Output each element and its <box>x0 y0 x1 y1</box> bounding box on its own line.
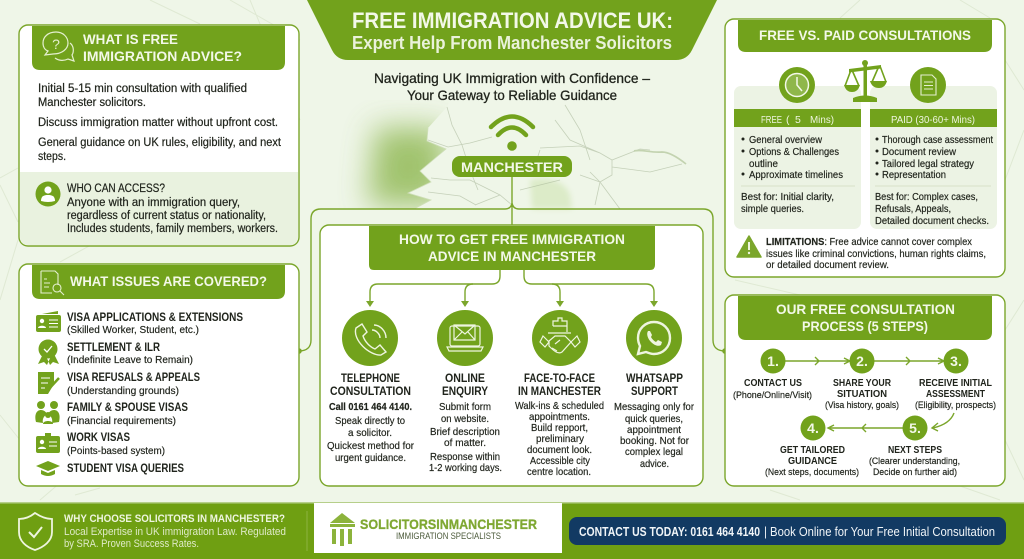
limitations note: issues like criminal convictions, human rights claims, <box>766 248 986 260</box>
method: face-to-face: appointments. <box>529 411 590 423</box>
step 1 <box>733 348 812 401</box>
icon: document search <box>41 271 64 295</box>
step 5: 5. <box>909 420 921 436</box>
icon: warning triangle <box>737 236 761 257</box>
who can access: Anyone with an immigration query, <box>67 197 240 209</box>
heading <box>738 20 992 52</box>
item: work visas: WORK VISAS <box>67 432 130 444</box>
free column: Mins) <box>810 114 834 126</box>
step 4: GUIDANCE <box>788 455 837 467</box>
icon: work badge <box>36 433 60 453</box>
why choose text: Local Expertise in UK immigration Law. Regulated <box>64 526 286 538</box>
method: telephone consultation: Call 0161 464 4140. <box>329 401 412 413</box>
footer bar <box>0 502 1024 559</box>
method: face-to-face: centre location. <box>527 466 591 478</box>
method: online enquiry: 1-2 working days. <box>429 462 502 474</box>
step 1: (Phone/Online/Visit) <box>733 390 812 401</box>
icon: clock <box>779 67 815 103</box>
heading <box>369 226 655 270</box>
step 3 <box>915 348 996 411</box>
item: family visas <box>67 402 188 427</box>
step 1: 1. <box>767 353 779 369</box>
panel: consultation process <box>725 295 1005 486</box>
method: face-to-face: preliminary <box>536 433 585 445</box>
heading: FREE VS. PAID CONSULTATIONS <box>759 27 971 43</box>
who can access: regardless of current status or nationality, <box>67 210 266 222</box>
item: visa applications <box>67 312 243 336</box>
method: telephone consultation: Speak directly to <box>335 415 405 427</box>
map of Manchester region <box>368 105 686 209</box>
step 5 <box>869 416 960 478</box>
heading: ADVICE IN MANCHESTER <box>428 248 596 264</box>
description text: Initial 5-15 min consultation with qualified <box>38 83 247 95</box>
icon: laptop envelope <box>437 310 493 366</box>
Manchester label: MANCHESTER <box>461 159 563 175</box>
item: refusals: (Understanding grounds) <box>67 385 179 397</box>
step 4 <box>765 416 859 478</box>
method: whatsapp support: WHATSAPP <box>626 373 683 385</box>
step 4: 4. <box>807 420 819 436</box>
method: whatsapp support: advice. <box>640 458 669 470</box>
connector frame <box>296 177 728 354</box>
limitations note: or detailed document review. <box>766 259 889 271</box>
Manchester label <box>452 156 572 177</box>
description text <box>38 83 282 163</box>
paid column: Tailored legal strategy <box>882 158 975 170</box>
method: face-to-face: Walk-ins & scheduled <box>515 400 604 412</box>
free column: simple queries. <box>741 203 804 215</box>
free column: Options & Challenges <box>749 146 839 158</box>
method: whatsapp support: complex legal <box>625 446 683 458</box>
method: online enquiry <box>429 373 502 474</box>
method: telephone consultation <box>327 373 414 464</box>
who can access <box>67 183 278 235</box>
item: refusals <box>67 372 200 397</box>
paid column: Detailed document checks. <box>875 215 989 227</box>
item: settlement: (Indefinite Leave to Remain) <box>67 354 193 366</box>
step 1: CONTACT US <box>744 377 802 389</box>
method: telephone consultation: CONSULTATION <box>330 386 411 398</box>
icon: pillars <box>330 513 355 546</box>
logo <box>314 503 562 553</box>
step 3: RECEIVE INITIAL <box>919 377 992 389</box>
item: family visas: FAMILY & SPOUSE VISAS <box>67 402 188 414</box>
description text: General guidance on UK rules, eligibility, and next <box>38 137 282 149</box>
step 2: SHARE YOUR <box>833 377 891 389</box>
panel: what issues are covered <box>19 264 299 486</box>
why choose text: WHY CHOOSE SOLICITORS IN MANCHESTER? <box>64 513 285 525</box>
icon: scales of justice <box>844 60 887 102</box>
method: face-to-face: Build repport, <box>531 422 588 434</box>
method: whatsapp support: SUPPORT <box>631 386 678 398</box>
icon: family <box>35 401 60 424</box>
free column: General overview <box>749 134 822 146</box>
heading: IMMIGRATION ADVICE? <box>83 49 242 64</box>
panel: free vs paid consultations <box>725 19 1005 277</box>
contact pill <box>569 517 1006 545</box>
icon: appeal document <box>38 372 59 394</box>
paid column: Thorough case assessment <box>882 134 993 146</box>
step 2 <box>825 348 899 411</box>
icon: whatsapp <box>626 310 682 366</box>
item: family visas: (Financial requirements) <box>67 415 176 427</box>
who can access: WHO CAN ACCESS? <box>67 183 165 195</box>
logo: SOLICITORSINMANCHESTER <box>360 516 537 532</box>
title: FREE IMMIGRATION ADVICE UK: <box>352 8 673 33</box>
free column: outline <box>749 158 778 170</box>
method: online enquiry: on website. <box>441 413 489 425</box>
panel: what is free immigration advice <box>19 25 299 246</box>
icon: handshake <box>532 310 588 366</box>
method: online enquiry: Brief description <box>430 426 500 438</box>
icon: question bubbles: ? <box>52 36 60 52</box>
step 3: ASSESSMENT <box>926 388 985 400</box>
connector arrows <box>366 270 658 307</box>
method: telephone consultation: a solicitor. <box>348 427 392 439</box>
tagline <box>374 70 650 103</box>
icon: telephone <box>342 310 398 366</box>
method: online enquiry: ENQUIRY <box>442 386 488 398</box>
heading: PROCESS (5 STEPS) <box>802 318 928 334</box>
method: face-to-face <box>515 373 604 478</box>
free column: 5 <box>795 114 801 126</box>
method: face-to-face: Accessible city <box>530 455 591 467</box>
method: telephone consultation: urgent guidance. <box>335 452 406 464</box>
icon: shield <box>19 513 52 550</box>
method: telephone consultation: Quickest method for <box>327 440 414 452</box>
paid column: PAID (30-60+ Mins) <box>891 114 975 126</box>
step 3: 3. <box>950 353 962 369</box>
step 2: 2. <box>856 353 868 369</box>
icon: document <box>910 67 946 103</box>
step 4: GET TAILORED <box>780 444 845 456</box>
title banner <box>307 0 717 60</box>
heading: OUR FREE CONSULTATION <box>776 301 955 317</box>
why choose text <box>64 513 286 550</box>
icon: visa card <box>36 311 61 332</box>
free column: Approximate timelines <box>749 169 843 181</box>
method: online enquiry: ONLINE <box>445 373 485 385</box>
item: visa applications: (Skilled Worker, Student, etc.) <box>67 324 199 336</box>
who can access: Includes students, family members, workers. <box>67 223 278 235</box>
step 5: Decide on further aid) <box>873 467 957 478</box>
step 5: (Clearer understanding, <box>869 456 960 467</box>
method: whatsapp support: quick queries, <box>625 413 683 425</box>
heading <box>738 296 992 340</box>
icon: question bubbles <box>43 32 74 61</box>
description text: Discuss immigration matter without upfront cost. <box>38 117 278 129</box>
heading: WHAT ISSUES ARE COVERED? <box>70 273 267 289</box>
free column: ( <box>786 114 790 126</box>
heading <box>32 265 285 299</box>
paid column: Best for: Complex cases, <box>875 191 978 203</box>
step 4: (Next steps, documents) <box>765 467 859 478</box>
item: visa applications: VISA APPLICATIONS & EXTENSIONS <box>67 312 243 324</box>
free column <box>734 86 861 229</box>
method: telephone consultation: TELEPHONE <box>341 373 400 385</box>
method: online enquiry: Response within <box>430 451 500 463</box>
method: whatsapp support: appointment <box>627 424 681 436</box>
free column: FREE <box>761 114 782 126</box>
free column: Best for: Initial clarity, <box>741 191 834 203</box>
process arrows <box>785 357 954 432</box>
method: face-to-face: document look. <box>527 444 592 456</box>
heading <box>32 26 285 70</box>
tagline: Navigating UK Immigration with Confidence – <box>374 70 650 86</box>
item: settlement: SETTLEMENT & ILR <box>67 342 161 354</box>
limitations note <box>766 236 986 271</box>
step 2: (Visa history, goals) <box>825 400 899 411</box>
paid column: Representation <box>882 169 946 181</box>
description text: Manchester solicitors. <box>38 97 146 109</box>
why choose text: by SRA. Proven Success Rates. <box>64 538 199 550</box>
icon: graduation cap <box>36 461 60 476</box>
icon: person <box>36 182 60 206</box>
paid column: Refusals, Appeals, <box>875 203 951 215</box>
heading: HOW TO GET FREE IMMIGRATION <box>399 231 625 247</box>
step 3: (Eligibility, prospects) <box>915 400 996 411</box>
contact pill: CONTACT US TODAY: 0161 464 4140 <box>579 524 760 539</box>
step 2: SITUATION <box>837 388 887 400</box>
paid column: Document review <box>882 146 956 158</box>
paid column <box>870 86 997 229</box>
method: face-to-face: FACE-TO-FACE <box>524 373 595 385</box>
limitations note: LIMITATIONS: Free advice cannot cover complex <box>766 236 973 248</box>
subtitle in banner: Expert Help From Manchester Solicitors <box>352 33 672 53</box>
method: face-to-face: IN MANCHESTER <box>518 386 602 398</box>
item: settlement <box>67 342 193 366</box>
tagline: Your Gateway to Reliable Guidance <box>407 87 617 103</box>
method: whatsapp support: Messaging only for <box>614 401 694 413</box>
heading: WHAT IS FREE <box>83 32 178 47</box>
contact pill: | Book Online for Your Free Initial Consultation <box>764 524 995 539</box>
icon: rosette <box>38 340 59 365</box>
step 5: NEXT STEPS <box>888 444 942 456</box>
method: online enquiry: Submit form <box>439 401 491 413</box>
method: online enquiry: of matter. <box>444 437 486 449</box>
item: work visas: (Points-based system) <box>67 445 165 457</box>
panel: how to get free immigration advice <box>320 225 703 486</box>
method: whatsapp support <box>614 373 694 470</box>
logo: IMMIGRATION SPECIALISTS <box>396 531 501 541</box>
item: student visas: STUDENT VISA QUERIES <box>67 463 184 475</box>
icon: wifi signal <box>491 116 533 151</box>
description text: steps. <box>38 151 66 163</box>
method: whatsapp support: booking. Not for <box>620 435 689 447</box>
item: work visas <box>67 432 165 457</box>
item: refusals: VISA REFUSALS & APPEALS <box>67 372 200 384</box>
